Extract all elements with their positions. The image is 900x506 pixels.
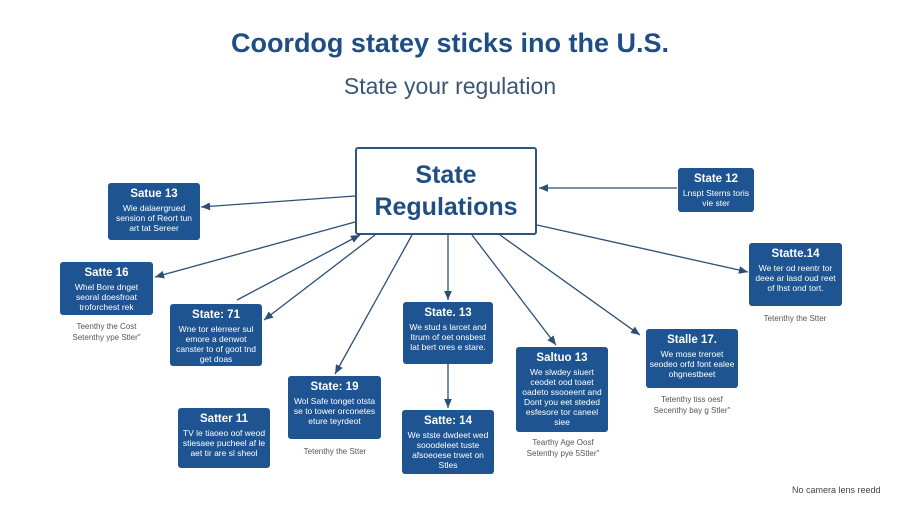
caption 16: Setenthy ype Stler" [72,333,141,342]
box: State 13 mid: State. 13 [424,307,472,319]
box: Satue 13: Satue 13 [130,188,178,200]
box: Satue 13 [108,183,200,240]
box: Statte 14 [749,243,842,306]
box: State 19: State: 19 [311,381,358,393]
box: State 71 [170,304,262,366]
box: State 13 mid: We stud s larcet and Itrum of oet onsbest lat bert ores e stare. [409,322,487,352]
box: Statte 14: Statte.14 [772,248,819,260]
box: State 71: State: 71 [192,309,240,321]
title: Coordog statey sticks ino the U.S. [231,28,669,58]
box: State 19: Wol Safe tonget otsta se to tower orconetes eture teyrdeot [294,396,375,426]
box: State 19 [288,376,381,439]
box: Satte 14 bottom [402,410,494,474]
box: Satter 11 [178,408,270,468]
box: Satter 11: Satter 11 [200,413,248,425]
box: Statte 14: We ter od reentr tor deee ar lasd oud reet of lhst ond tort. [755,263,836,293]
box: Satue 13: Wie dalaergrued sension of Reort tun art tat Sereer [116,203,192,233]
caption 13: Tearthy Age Oosf [532,438,594,447]
box: Stalle 17 [646,329,738,388]
box: Saltuo 13: Saltuo 13 [536,352,588,364]
box: Satte 14 bottom: Satte: 14 [424,415,472,427]
box: Saltuo 13 [516,347,608,432]
caption 17: Tetenthy tiss oesf [661,395,723,404]
box: Satte 16 [60,262,153,315]
box: Satte 16: Whel Bore dnget seoral doesfroat troforchest rek [75,282,138,312]
center box: State Regulations [355,147,537,235]
box: Satte 16: Satte 16 [84,267,129,279]
box: Stalle 17: Stalle 17. [667,334,717,346]
box: State 12: State 12 [694,173,738,185]
caption 17: Secenthy bay g Stler" [654,406,730,415]
box: Saltuo 13: We slwdey siuert ceodet ood toaet oadeto ssooeent and Dont you eet steded esfesore tor caneel siee [522,367,602,427]
caption 13 [527,438,599,458]
subtitle: State your regulation [344,73,556,99]
box: State 12 [678,168,754,212]
caption right: Tetenthy the Stter [764,314,826,323]
footnote: No camera lens reedd [792,485,881,495]
center box: State Regulations: State [415,161,477,189]
box: Satte 14 bottom: We stste dwdeet wed sooodeleet tuste afsoeoese trwet on Stles [408,430,488,470]
box: State 13 mid [403,302,493,364]
caption 16: Teenthy the Cost [76,322,137,331]
box: State 12: Lnspt Sterns toris vie ster [683,188,749,208]
caption 17 [654,395,730,415]
box: State 71: Wne tor elerreer sul emore a denwot canster to of goot tnd get doas [176,324,256,364]
center box: State Regulations: Regulations [374,193,518,221]
caption 19: Tetenthy the Stter [304,447,366,456]
caption 13: Setenthy pye 5Stler" [527,449,599,458]
box: Satter 11: TV le tiaoeo oof weod stiesaee pucheel af le aet tir are sl sheol [183,428,265,458]
box: Stalle 17: We mose treroet seodeo orfd font ealee ohgnestbeet [650,349,734,379]
caption 16 [72,322,141,342]
